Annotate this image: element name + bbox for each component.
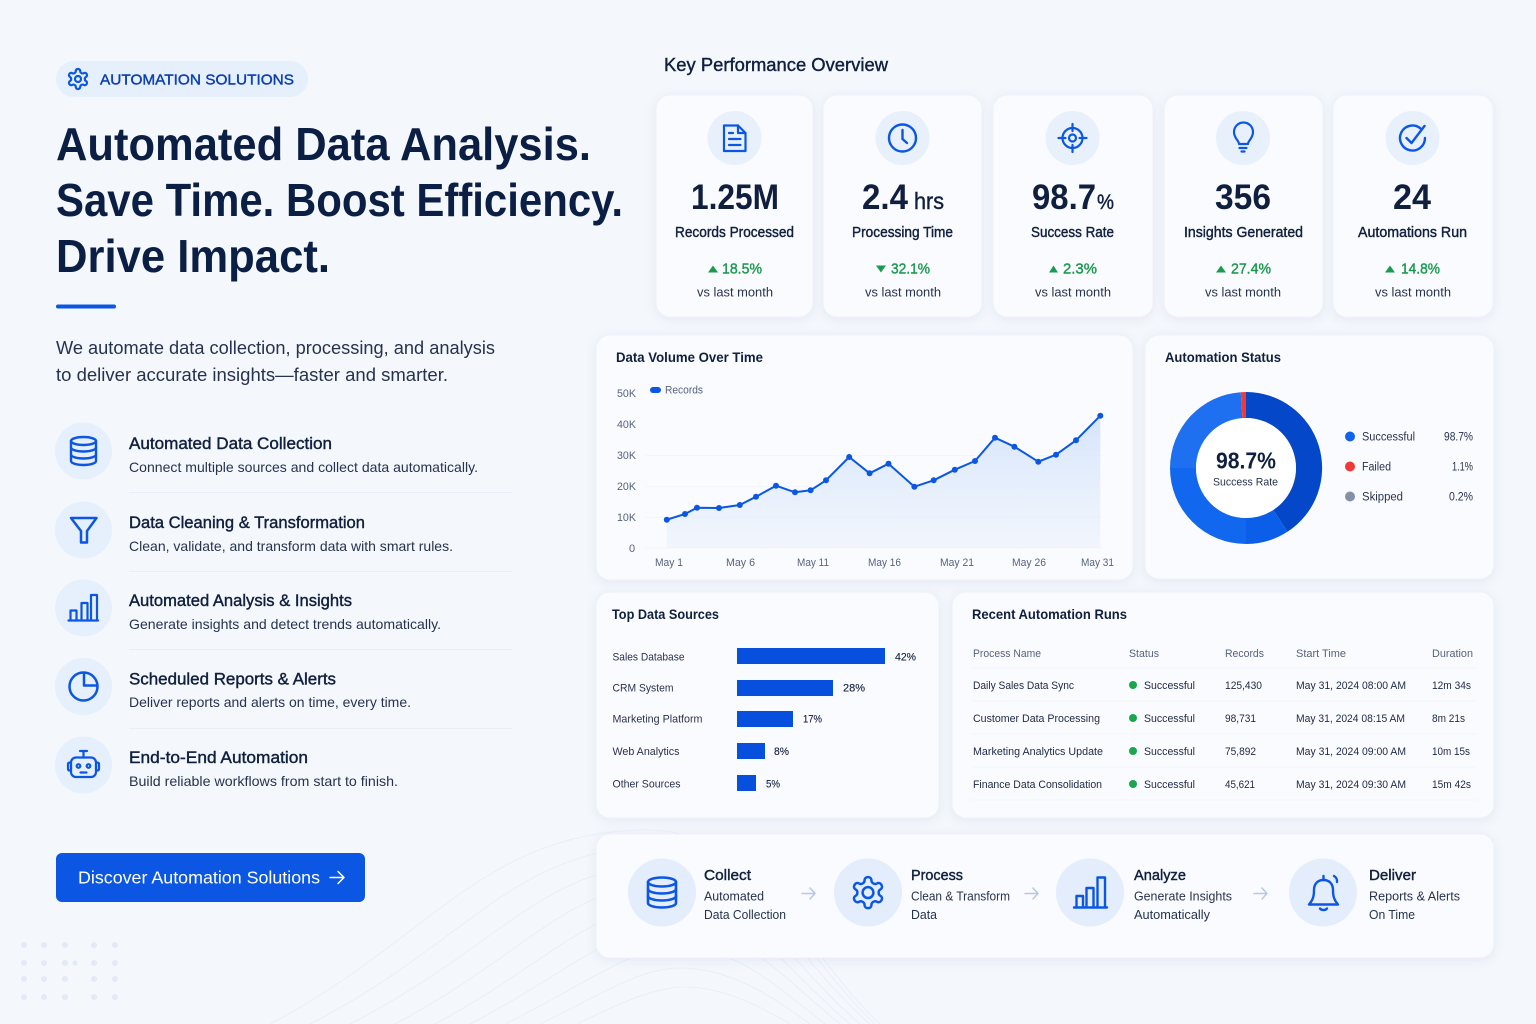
arrow — [1254, 888, 1267, 899]
x axis labels: May 1 — [655, 557, 683, 569]
feature: scheduled reports: Deliver reports and alerts on time, every time. — [129, 694, 411, 710]
y axis labels: 0 — [629, 543, 635, 555]
table row: finance data consolidation: Finance Data Consolidation — [973, 779, 1102, 791]
table row: finance data consolidation: 15m 42s — [1432, 779, 1471, 791]
table header: Duration — [1432, 648, 1473, 660]
donut legend: Successful — [1362, 432, 1415, 444]
feature: automated analysis: Generate insights and detect trends automatically. — [129, 616, 441, 632]
intro paragraph: We automate data collection, processing, and analysis — [56, 337, 495, 358]
x axis labels: May 11 — [797, 557, 829, 569]
step: deliver: Reports & Alerts — [1369, 890, 1460, 904]
chart legend: Records — [665, 384, 703, 396]
intro paragraph — [56, 337, 495, 385]
table header: Process Name — [973, 648, 1041, 660]
y axis labels — [617, 388, 637, 555]
icon: clock — [889, 124, 916, 152]
y axis labels: 10K — [617, 512, 637, 524]
KPI card: automations run: vs last month — [1375, 284, 1451, 300]
table row: customer data processing: May 31, 2024 08:15 AM — [1296, 713, 1405, 725]
panel: data volume over time: Data Volume Over Time — [616, 349, 763, 365]
panel: top data sources — [596, 592, 939, 818]
arrow — [802, 888, 815, 899]
intro paragraph: to deliver accurate insights—faster and smarter. — [56, 364, 448, 385]
title: Automated Data Analysis. — [56, 118, 591, 170]
table row: marketing analytics update — [973, 746, 1470, 758]
step: analyze: Automatically — [1134, 908, 1211, 922]
step: deliver: Deliver — [1369, 868, 1416, 884]
donut chart: Success Rate — [1213, 476, 1278, 488]
panel: recent automation runs: Recent Automation Runs — [972, 606, 1127, 622]
y axis labels: 20K — [617, 481, 637, 493]
step: analyze: Generate Insights — [1134, 890, 1232, 904]
KPI card: processing time: 32.1% — [891, 262, 930, 278]
KPI card: records processed — [656, 95, 813, 317]
table row: finance data consolidation — [973, 779, 1471, 791]
table row: marketing analytics update: May 31, 2024 09:00 AM — [1296, 746, 1406, 758]
table header: Records — [1225, 648, 1264, 660]
table row: customer data processing: Successful — [1144, 713, 1195, 725]
panel: data volume over time — [596, 335, 1133, 580]
KPI card: records processed: Records Processed — [675, 225, 794, 241]
table row: marketing analytics update: 10m 15s — [1432, 746, 1470, 758]
bar chart: Marketing Platform — [612, 714, 702, 726]
feature: data cleaning — [55, 502, 453, 558]
donut legend: 0.2% — [1449, 492, 1473, 504]
icon: light bulb — [1234, 122, 1253, 152]
step: deliver — [1289, 858, 1460, 926]
x axis labels: May 6 — [726, 557, 755, 569]
bar chart: 8% — [774, 746, 789, 758]
arrow — [1025, 888, 1038, 899]
title: Drive Impact. — [56, 230, 330, 282]
table row: customer data processing: Customer Data Processing — [973, 713, 1100, 725]
icon: arrow — [330, 872, 344, 884]
feature: scheduled reports — [55, 658, 411, 715]
table row: daily sales data sync: Successful — [1144, 680, 1195, 692]
step: analyze: Analyze — [1134, 868, 1186, 884]
panel: automation status: Automation Status — [1165, 349, 1281, 365]
KPI card: automations run: Automations Run — [1358, 225, 1467, 241]
KPI card: automations run — [1333, 95, 1493, 317]
table row: daily sales data sync: May 31, 2024 08:00 AM — [1296, 680, 1406, 692]
feature: data cleaning: Data Cleaning & Transformation — [129, 514, 365, 532]
panel: recent automation runs — [952, 592, 1494, 818]
y axis labels: 40K — [617, 419, 637, 431]
table header: Status — [1129, 648, 1159, 660]
chart legend — [650, 384, 703, 396]
KPI card: insights generated: Insights Generated — [1184, 225, 1303, 241]
KPI card: processing time: vs last month — [865, 284, 941, 300]
feature: end-to-end automation — [55, 736, 398, 794]
feature: end-to-end automation: End-to-End Automation — [129, 749, 308, 767]
feature: automated data collection: Connect multiple sources and collect data automatically. — [129, 459, 478, 475]
heading: key performance overview: Key Performance Overview — [664, 54, 889, 75]
donut legend: Failed — [1362, 462, 1391, 474]
table row: finance data consolidation: 45,621 — [1225, 779, 1255, 791]
KPI card: success rate: Success Rate — [1031, 225, 1114, 241]
KPI card: success rate — [993, 95, 1153, 317]
table header: Start Time — [1296, 648, 1346, 660]
table header — [973, 648, 1473, 660]
title — [56, 118, 623, 282]
table row: marketing analytics update: 75,892 — [1225, 746, 1256, 758]
icon: document — [724, 126, 746, 151]
KPI card: insights generated: 27.4% — [1231, 262, 1271, 278]
step: collect: Automated — [704, 890, 764, 904]
icon: target — [1058, 124, 1086, 152]
line chart: records — [664, 413, 1103, 548]
bar chart: 42% — [895, 652, 916, 664]
table row: daily sales data sync: 125,430 — [1225, 680, 1262, 692]
step: analyze — [1056, 858, 1232, 926]
KPI card: success rate: 98.7 — [1032, 178, 1096, 217]
KPI card: processing time: Processing Time — [852, 225, 953, 241]
button: discover automation solutions: Discover Automation Solutions — [78, 868, 320, 888]
KPI card: insights generated: 356 — [1215, 178, 1271, 217]
donut chart: 98.7% — [1216, 448, 1276, 474]
bar chart: Web Analytics — [612, 746, 680, 758]
table row: daily sales data sync — [973, 680, 1471, 692]
step: deliver: On Time — [1369, 908, 1415, 922]
feature: automated data collection: Automated Data Collection — [129, 435, 332, 453]
feature: scheduled reports: Scheduled Reports & Alerts — [129, 670, 336, 688]
x axis labels: May 16 — [868, 557, 901, 569]
KPI card: insights generated: vs last month — [1205, 284, 1281, 300]
table row: customer data processing — [973, 713, 1465, 725]
table row: finance data consolidation: May 31, 2024 09:30 AM — [1296, 779, 1406, 791]
step: collect: Collect — [704, 868, 751, 884]
table row: marketing analytics update: Successful — [1144, 746, 1195, 758]
y axis labels: 50K — [617, 388, 637, 400]
panel: top data sources: Top Data Sources — [612, 606, 719, 622]
panel: automation status — [1145, 335, 1494, 579]
table row: daily sales data sync: 12m 34s — [1432, 680, 1471, 692]
bar chart: Sales Database — [612, 652, 684, 664]
KPI card: insights generated — [1164, 95, 1323, 317]
bar chart: 17% — [803, 714, 822, 726]
x axis labels: May 21 — [940, 557, 974, 569]
feature: automated analysis: Automated Analysis & Insights — [129, 592, 352, 610]
x axis labels: May 31 — [1081, 557, 1114, 569]
donut legend: Skipped — [1362, 492, 1403, 504]
table row: customer data processing: 8m 21s — [1432, 713, 1465, 725]
KPI card: success rate: vs last month — [1035, 284, 1111, 300]
KPI card: success rate: 2.3% — [1063, 262, 1097, 278]
badge: automation solutions — [56, 61, 308, 97]
bar chart: 5% — [766, 778, 780, 790]
icon: check circle — [1400, 126, 1425, 151]
x axis labels — [655, 557, 1114, 569]
bar chart: Other Sources — [612, 778, 681, 790]
bar chart: CRM System — [612, 682, 674, 694]
KPI card: records processed: 18.5% — [722, 262, 762, 278]
donut legend — [1345, 432, 1473, 504]
feature list — [55, 422, 512, 794]
badge label: AUTOMATION SOLUTIONS — [100, 72, 294, 88]
step: process: Clean & Transform — [911, 890, 1010, 904]
table row: marketing analytics update: Marketing Analytics Update — [973, 746, 1103, 758]
feature: data cleaning: Clean, validate, and transform data with smart rules. — [129, 538, 453, 554]
KPI card: processing time: hrs — [914, 188, 944, 214]
KPI card: processing time: 2.4 — [862, 178, 909, 217]
table row: customer data processing: 98,731 — [1225, 713, 1256, 725]
bar chart: 28% — [843, 682, 865, 694]
KPI card: automations run: 24 — [1393, 178, 1432, 217]
y axis labels: 30K — [617, 450, 637, 462]
icon: gear — [69, 69, 87, 89]
KPI card: processing time — [823, 95, 982, 317]
table row: daily sales data sync: Daily Sales Data Sync — [973, 680, 1074, 692]
step: collect — [628, 858, 786, 926]
KPI card: automations run: 14.8% — [1401, 262, 1440, 278]
feature: automated data collection — [55, 422, 478, 480]
button: discover automation solutions — [56, 853, 365, 902]
bar chart — [612, 648, 916, 791]
table row: finance data consolidation: Successful — [1144, 779, 1195, 791]
feature: end-to-end automation: Build reliable workflows from start to finish. — [129, 773, 398, 789]
step: collect: Data Collection — [704, 908, 786, 922]
KPI card: records processed: 1.25M — [691, 178, 779, 217]
step: process — [834, 858, 1010, 926]
donut legend: 98.7% — [1444, 432, 1473, 444]
step: process: Data — [911, 908, 937, 922]
panel: process flow — [596, 834, 1494, 958]
KPI card: records processed: vs last month — [697, 284, 773, 300]
donut legend: 1.1% — [1452, 462, 1473, 474]
feature: automated analysis — [55, 580, 441, 636]
KPI card: success rate: % — [1097, 191, 1114, 214]
step: process: Process — [911, 868, 963, 884]
donut chart — [1170, 392, 1322, 544]
x axis labels: May 26 — [1012, 557, 1046, 569]
title: Save Time. Boost Efficiency. — [56, 174, 623, 226]
